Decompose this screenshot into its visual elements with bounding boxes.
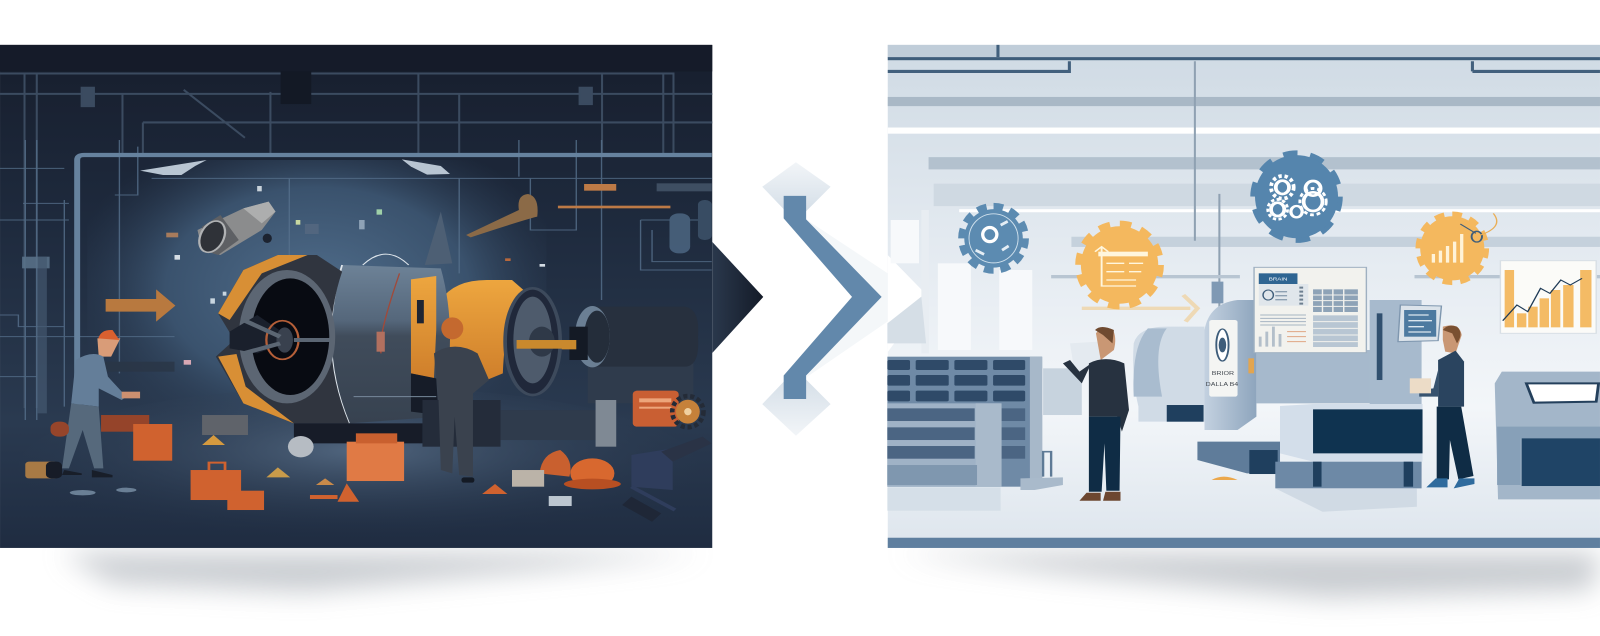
central machine xyxy=(1197,282,1422,480)
scattered dark equipment xyxy=(25,437,712,522)
right desk machine xyxy=(1495,372,1600,499)
central machine: BRIOR xyxy=(1212,371,1235,377)
ceiling beams xyxy=(888,45,1600,347)
wall chart xyxy=(1500,261,1596,333)
orange rear housing xyxy=(441,280,523,380)
panel: right modern factory scene xyxy=(887,45,1600,548)
central chevron arrow xyxy=(784,196,882,399)
central machine: DALLA B4 xyxy=(1206,382,1239,388)
report board: BRAIN xyxy=(1269,277,1288,282)
wall pipes xyxy=(0,140,712,420)
gear icon: orange bars xyxy=(1419,213,1497,281)
scene backdrop xyxy=(0,45,712,548)
spotlight wall xyxy=(87,160,546,467)
centre worker xyxy=(434,317,489,483)
vertical fin behind machine xyxy=(425,212,452,265)
orange gearbox xyxy=(633,391,703,427)
floating debris xyxy=(166,186,545,365)
person with tablet xyxy=(1063,327,1129,501)
machine base xyxy=(202,400,616,457)
wrench silhouette xyxy=(466,194,538,237)
background machine xyxy=(1043,327,1205,422)
main pipe xyxy=(77,155,712,417)
ceiling lamps xyxy=(140,159,450,175)
central pale arrow marks xyxy=(762,162,923,436)
front housing xyxy=(216,255,349,423)
main cylinder xyxy=(331,254,450,423)
factory backdrop xyxy=(888,45,1600,548)
orange toolboxes and cones xyxy=(51,415,621,510)
workstation desk xyxy=(1275,404,1423,512)
shadow under right panel xyxy=(898,553,1600,598)
mesh fan guard xyxy=(505,288,572,395)
report board xyxy=(1254,267,1366,353)
ceiling pipework xyxy=(0,45,712,408)
shadow under left panel xyxy=(61,553,704,592)
wall monitor xyxy=(1398,305,1441,342)
person with cup xyxy=(1410,325,1474,488)
storage shelves xyxy=(887,357,1063,511)
orange wall rail xyxy=(558,184,670,208)
arrow tip of left panel xyxy=(712,242,763,353)
arrow pointing at machine xyxy=(106,289,175,322)
pale arrow xyxy=(1082,295,1197,322)
white arrow overlap xyxy=(888,255,929,352)
panel: left broken machine scene xyxy=(0,45,763,548)
bottom rail xyxy=(888,538,1600,548)
shaft xyxy=(517,340,576,349)
left worker xyxy=(62,330,140,477)
flying camera-like part xyxy=(195,202,276,255)
gear icon: orange document xyxy=(1079,225,1160,305)
gear icon: blue gears xyxy=(1254,154,1339,239)
windows xyxy=(887,210,1600,353)
gear icon: blue circuit xyxy=(962,207,1025,269)
scene detail group xyxy=(0,140,712,547)
factory interior detail xyxy=(887,154,1600,512)
floor glow xyxy=(18,387,698,547)
right motor block xyxy=(569,306,698,403)
